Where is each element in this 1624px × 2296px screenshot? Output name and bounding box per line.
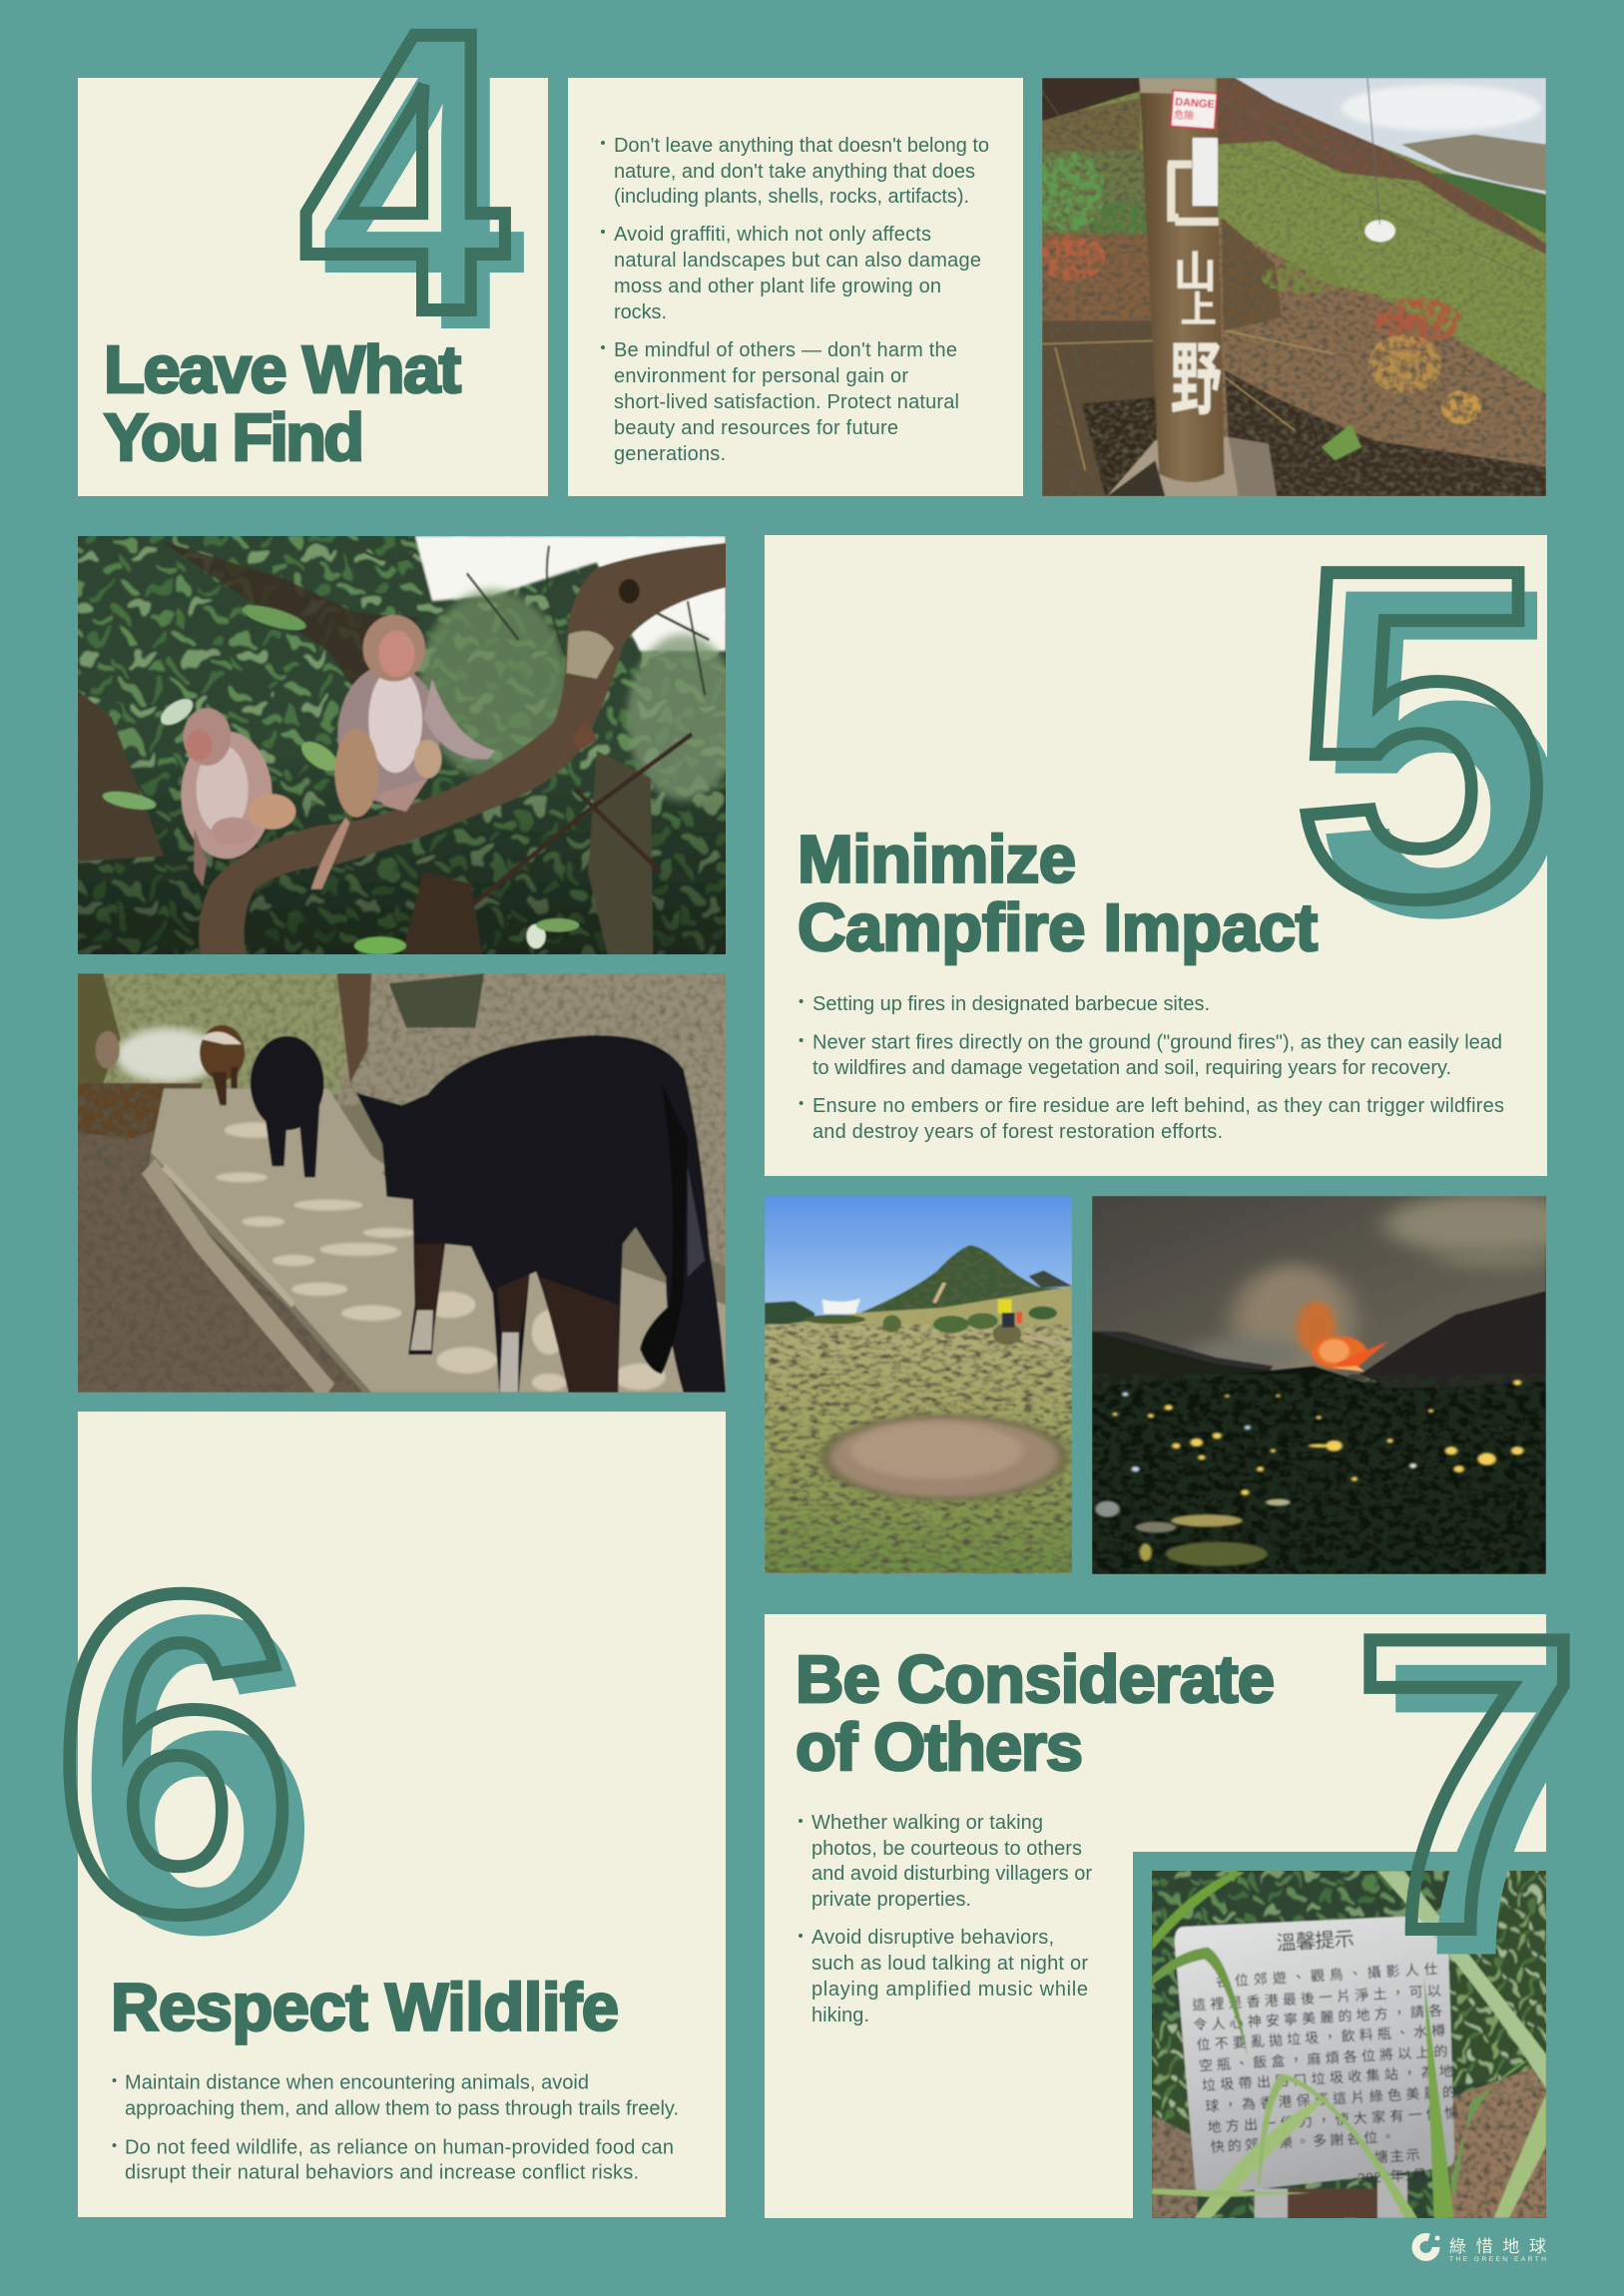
sign text: 地方出一份力，使大家有一個愉 <box>1207 2104 1459 2135</box>
photo: hillside wildfire at night above a village <box>1092 1195 1589 1574</box>
logo: The Green Earth <box>1415 2236 1546 2263</box>
sign text: 各位郊遊、觀鳥、攝影人仕， <box>1215 1960 1457 1990</box>
text block: considerate tips: and avoid disturbing villagers or <box>812 1863 1092 1885</box>
heading: Respect Wildlife: Respect Wildlife <box>111 1971 619 2044</box>
heading: Be Considerate of Others <box>796 1642 1275 1785</box>
panel: minimize campfire impact <box>765 535 1547 1176</box>
heading: Minimize Campfire Impact <box>798 823 1318 965</box>
text block: leave what you find tips: beauty and resources for future <box>614 417 898 439</box>
sign text: 令人心神安寧美麗的地方，請各 <box>1193 2003 1443 2033</box>
panel: leave what you find heading <box>78 78 548 496</box>
text block: leave what you find tips: Avoid graffiti, which not only affects <box>614 224 931 246</box>
text block: considerate tips: Avoid disruptive behaviors, <box>812 1927 1054 1949</box>
panel: respect wildlife <box>78 1412 726 2217</box>
sign text: 位不要亂拋垃圾，飲料瓶、水樽 <box>1196 2022 1446 2052</box>
text block: campfire tips: Setting up fires in designated barbecue sites. <box>812 993 1210 1015</box>
photo: graffiti on utility pole on burnt hillside: 上 <box>1180 289 1217 330</box>
sign text: 垃圾帶出路口垃圾收集站，為地 <box>1202 2062 1453 2093</box>
text block: leave what you find tips <box>601 135 989 465</box>
text block: leave what you find tips: environment for personal gain or <box>614 365 908 387</box>
text block: wildlife tips: Do not feed wildlife, as reliance on human-provided food can <box>125 2137 674 2159</box>
heading: Minimize Campfire Impact: Minimize <box>798 823 1076 896</box>
logo: The Green Earth: THE GREEN EARTH <box>1449 2256 1546 2263</box>
text block: wildlife tips: Maintain distance when encountering animals, avoid <box>125 2072 589 2094</box>
numeral 5: 5 <box>1312 490 1568 1014</box>
photo: macaques sitting on a tree branch <box>78 536 726 954</box>
text block: campfire tips: Never start fires directly on the ground ("ground fires"), as they can easily lead <box>812 1032 1502 1054</box>
text block: leave what you find tips: moss and other plant life growing on <box>614 276 941 297</box>
sign text: 球，為香港保護這片綠色美麗的 <box>1205 2083 1456 2114</box>
numeral 6: 6 <box>54 1499 298 2007</box>
heading: Minimize Campfire Impact: Campfire Impact <box>798 890 1318 965</box>
numeral 7: 7 <box>1353 1550 1581 2018</box>
sign text: 溫馨提示 <box>1276 1928 1354 1955</box>
heading: Be Considerate of Others: Be Considerate <box>796 1642 1275 1717</box>
sign text: 2020年1月1日 <box>1356 2165 1449 2186</box>
photo: graffiti on utility pole on burnt hillside: DANGE <box>1175 96 1215 111</box>
sign text: 空瓶、飯盒，麻煩各位將以上的 <box>1198 2042 1448 2073</box>
text block: considerate tips: private properties. <box>812 1889 971 1911</box>
numeral 7: 7 <box>1377 1575 1607 2043</box>
sign text: 這裡是香港最後一片淨土，可以 <box>1192 1983 1441 2013</box>
text block: considerate tips: playing amplified music while <box>812 1979 1088 2001</box>
text block: wildlife tips: disrupt their natural behaviors and increase conflict risks. <box>125 2162 639 2184</box>
heading: Leave What You Find: Leave What <box>104 332 461 407</box>
text block: leave what you find tips: Don't leave anything that doesn't belong to <box>614 135 989 157</box>
text block: wildlife tips <box>112 2072 679 2184</box>
text block: considerate tips <box>799 1812 1092 2026</box>
text block: leave what you find tips: Be mindful of others — don't harm the <box>614 339 957 361</box>
text block: considerate tips: Whether walking or taking <box>812 1812 1043 1834</box>
text block: campfire tips: and destroy years of forest restoration efforts. <box>812 1121 1223 1143</box>
photo: warm notice sign among grass and shrubs <box>1152 1871 1546 2218</box>
text block: considerate tips: hiking. <box>812 2005 869 2026</box>
text block: campfire tips: to wildfires and damage vegetation and soil, requiring years for recovery. <box>812 1057 1451 1079</box>
text block: leave what you find tips: generations. <box>614 443 726 465</box>
photo: burnt ground patch on grassy hillside <box>765 1196 1072 1574</box>
heading: Leave What You Find <box>104 332 461 475</box>
text block: considerate tips: such as loud talking at night or <box>812 1953 1088 1975</box>
photo: graffiti on utility pole on burnt hillside: 山 <box>1174 250 1217 297</box>
heading: Be Considerate of Others: of Others <box>796 1710 1083 1785</box>
text block: leave what you find tips: natural landscapes but can also damage <box>614 250 981 272</box>
text block: leave what you find tips: short-lived satisfaction. Protect natural <box>614 391 959 413</box>
photo: graffiti on utility pole on burnt hillside <box>1032 78 1546 496</box>
sign text <box>1192 1929 1457 2184</box>
heading: Leave What You Find: You Find <box>104 400 364 475</box>
text block: considerate tips: photos, be courteous to others <box>812 1838 1082 1860</box>
numeral 6: 6 <box>76 1520 320 2027</box>
sign text: 塘主示 <box>1373 2146 1420 2165</box>
photo: graffiti on utility pole on burnt hillside: 野 <box>1170 336 1222 425</box>
text block: leave what you find tips: nature, and don't take anything that does <box>614 161 975 183</box>
photo: graffiti on utility pole on burnt hillside: 危險 <box>1174 108 1195 122</box>
photo: cattle walking along a shaded path <box>77 973 726 1393</box>
panel: be considerate of others <box>765 1614 1546 2218</box>
numeral 5: 5 <box>1293 471 1549 995</box>
text block: campfire tips <box>800 993 1504 1143</box>
sign text: 快的郊遊樂。多謝各位。 <box>1210 2128 1395 2155</box>
text block: leave what you find tips: rocks. <box>614 301 667 323</box>
panel: leave what you find tips <box>568 78 1023 496</box>
text block: wildlife tips: approaching them, and allow them to pass through trails freely. <box>125 2098 679 2120</box>
logo: The Green Earth: 綠惜地球 <box>1449 2237 1546 2256</box>
text block: leave what you find tips: (including plants, shells, rocks, artifacts). <box>614 186 969 208</box>
text block: campfire tips: Ensure no embers or fire residue are left behind, as they can trigger wildfires <box>812 1095 1504 1117</box>
